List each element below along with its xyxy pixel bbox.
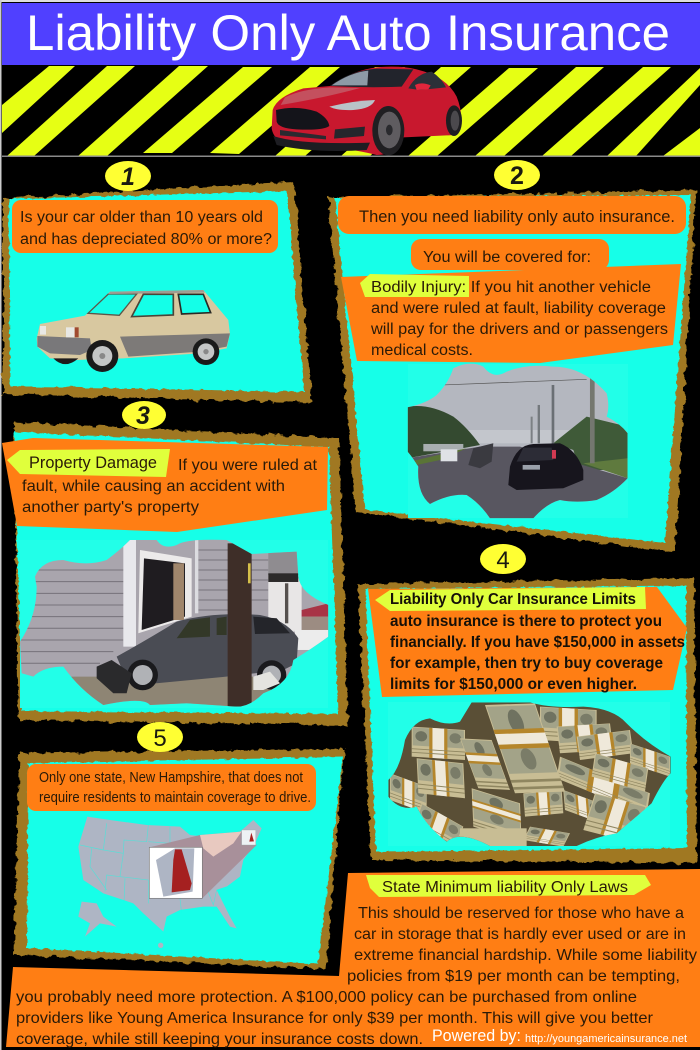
photo: car crashed into house: [17, 537, 330, 710]
panel 5 frame: [14, 749, 344, 969]
property damage callout: [2, 438, 328, 532]
limits callout: for example, then try to buy coverage: [390, 655, 663, 672]
property damage callout: If you were ruled at: [178, 457, 318, 474]
icon: beige hatchback car: [37, 290, 230, 372]
body paragraph: you probably need more protection. A $100,000 policy can be purchased from online: [16, 989, 637, 1006]
panel 1: older car: [3, 182, 312, 403]
bodily injury callout: will pay for the drivers and or passengers: [370, 321, 668, 338]
subheading bubble: [411, 239, 609, 270]
body paragraph: policies from $19 per month can be tempting,: [347, 968, 680, 985]
bodily injury callout: [341, 264, 681, 363]
body paragraph: car in storage that is hardly ever used or are in: [354, 926, 686, 943]
panel 4 background: [365, 586, 687, 852]
limits callout: limits for $150,000 or even higher.: [390, 676, 637, 693]
section tag: State Minimum liability Only Laws: [382, 879, 628, 896]
badge 3: 3: [136, 402, 150, 430]
icon: red sports car: [272, 67, 462, 155]
bodily injury callout: and were ruled at fault, liability coverage: [371, 300, 666, 317]
panel 1 frame: [3, 182, 312, 403]
badge 2: [494, 160, 540, 190]
badge 5: [137, 722, 183, 752]
bodily injury callout: medical costs.: [371, 342, 473, 359]
badge 3: [122, 401, 166, 430]
badge 1: 1: [121, 163, 135, 191]
photo: pile of cash: [383, 700, 677, 850]
photo: road accident: [408, 360, 628, 520]
bodily injury callout: Bodily Injury: If you hit another vehicle: [371, 279, 651, 296]
powered by credit: Powered by:: [432, 1026, 521, 1045]
crash photo backing: [408, 364, 628, 518]
panel 1 text bubble: [12, 200, 278, 253]
panel 3 frame: [14, 422, 348, 725]
badge 1: [105, 161, 151, 191]
badge 5: 5: [153, 725, 167, 752]
house photo backing: [20, 540, 328, 708]
body paragraph: This should be reserved for those who have a: [358, 905, 684, 922]
panel 4 frame: [358, 578, 697, 863]
property damage callout: fault, while causing an accident with: [22, 478, 285, 495]
property damage callout: another party's property: [22, 499, 199, 516]
badge 4: [480, 544, 526, 574]
subheading bubble: You will be covered for:: [423, 249, 591, 266]
panel 2: liability coverage: [328, 190, 696, 552]
body paragraph: coverage, while still keeping your insurance costs down.: [16, 1031, 423, 1048]
heading bubble: Then you need liability only auto insurance.: [359, 207, 675, 226]
US map with New Hampshire highlighted: [78, 817, 262, 948]
text bubble: Only one state, New Hampshire, that does not: [39, 770, 303, 786]
badge 4: 4: [496, 547, 510, 574]
panel 6: state minimum laws: [6, 869, 700, 1048]
money photo backing: [388, 702, 670, 846]
property damage callout: Property Damage: [29, 454, 157, 472]
panel 3 background: [14, 432, 338, 714]
limits callout: auto insurance is there to protect you: [390, 613, 662, 630]
panel 1 text bubble: and has depreciated 80% or more?: [20, 231, 272, 248]
text bubble: require residents to maintain coverage to drive.: [39, 790, 311, 806]
title banner: Liability Only Auto Insurance: [26, 5, 670, 61]
panel 5 background: [27, 757, 343, 964]
panel 1 text bubble: Is your car older than 10 years old: [20, 209, 263, 226]
panel 3: property damage: [2, 422, 348, 725]
limits callout: Liability Only Car Insurance Limits: [390, 591, 636, 608]
panel 2 background: [335, 195, 691, 543]
powered by credit: [432, 1026, 687, 1045]
heading bubble: [338, 196, 686, 234]
text bubble: [27, 764, 316, 811]
limits callout: financially. If you have $150,000 in assets: [390, 634, 685, 651]
panel 2 frame: [328, 190, 696, 552]
badge 2: 2: [510, 162, 524, 190]
panel 4: limits: [358, 578, 697, 863]
hazard stripe band: [2, 65, 700, 157]
panel 5: New Hampshire: [14, 749, 344, 969]
body paragraph: extreme financial hardship. While some liability: [354, 947, 697, 964]
orange panel shape: [6, 869, 700, 1047]
limits callout: [368, 587, 687, 697]
panel 1 background: [9, 191, 304, 392]
powered by credit: http://youngamericainsurance.net: [525, 1033, 687, 1045]
body paragraph: [16, 905, 697, 1048]
section tag: [366, 875, 651, 897]
body paragraph: providers like Young America Insurance for only $39 per month. This will give you better: [16, 1010, 654, 1027]
